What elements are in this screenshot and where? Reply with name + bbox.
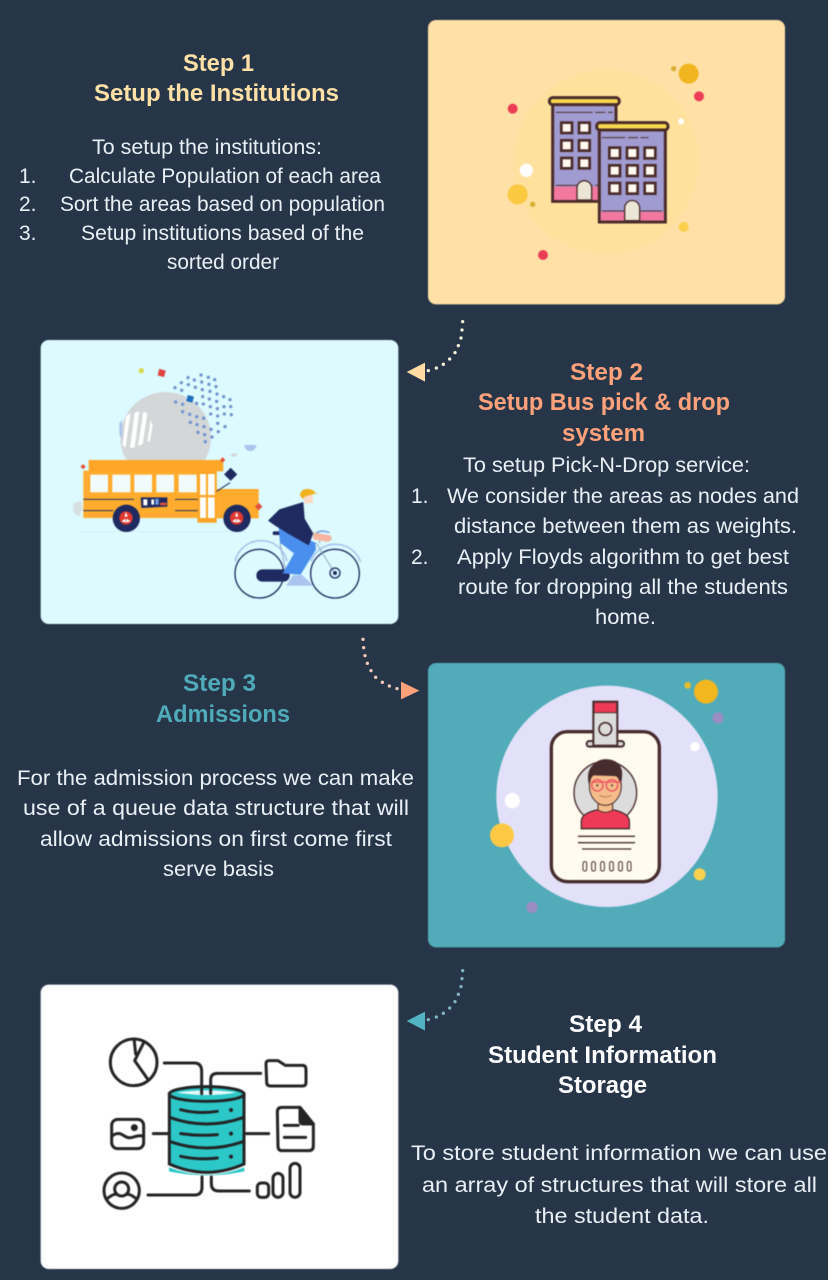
- heading: step 1: Setup the Institutions: [94, 80, 339, 107]
- text block: step 1 body: To setup the institutions:: [92, 136, 322, 159]
- heading: step 2: [478, 359, 730, 447]
- heading: step 4: Storage: [558, 1072, 647, 1099]
- arrow: step 2 to step 3: [361, 638, 419, 699]
- text block: step 3 body: serve basis: [163, 858, 274, 881]
- icon: picture: [112, 1119, 144, 1149]
- panel: step 4 illustration, database: [41, 985, 398, 1269]
- text block: step 2 body: route for dropping all the students: [458, 576, 788, 599]
- text block: step 4 body: the student data.: [535, 1205, 709, 1228]
- text block: step 4 body: To store student information we can use: [411, 1142, 827, 1165]
- text block: step 1 body: 3.: [19, 222, 37, 245]
- text block: step 1 body: sorted order: [167, 251, 279, 274]
- panel: step 4 text: [411, 1011, 827, 1228]
- heading: step 4: [488, 1011, 717, 1099]
- text block: step 1 body: [19, 136, 385, 274]
- heading: step 1: [94, 50, 339, 107]
- heading: step 3: Admissions: [156, 701, 290, 728]
- panel: step 2 illustration, bus and cyclist: [41, 340, 398, 624]
- text block: step 2 body: 2.: [411, 546, 429, 569]
- text block: step 1 body: Sort the areas based on population: [60, 193, 385, 216]
- text block: step 2 body: 1.: [411, 485, 429, 508]
- panel: step 3 text: [17, 670, 414, 881]
- icon: cyclist: [235, 489, 361, 598]
- text block: step 2 body: home.: [595, 606, 656, 629]
- text block: step 3 body: allow admissions on first come first: [40, 828, 392, 851]
- icons and connectors around database: [104, 1039, 313, 1208]
- heading: step 2: Step 2: [570, 359, 643, 386]
- heading: step 1: Step 1: [183, 50, 254, 77]
- text block: step 3 body: For the admission process we can make: [17, 767, 414, 790]
- text block: step 1 body: Setup institutions based of the: [81, 222, 364, 245]
- icon: school bus: [73, 457, 262, 532]
- heading: step 2: system: [562, 420, 645, 447]
- panel: step 1 illustration, buildings: [428, 20, 785, 304]
- decorative dots: badge: [490, 680, 724, 913]
- background globe and dots: [119, 368, 256, 483]
- text block: step 2 body: We consider the areas as nodes and: [447, 485, 799, 508]
- text block: step 1 body: Calculate Population of each area: [69, 165, 381, 188]
- text block: step 3 body: [17, 767, 414, 881]
- icon: pie chart: [110, 1039, 157, 1086]
- icon: database cylinder: [169, 1087, 244, 1175]
- text block: step 1 body: 2.: [19, 193, 37, 216]
- icon: front building: [597, 123, 668, 222]
- heading: step 3: [156, 670, 290, 728]
- arrow: step 3 to step 4: [407, 969, 464, 1031]
- text block: step 1 body: 1.: [19, 165, 37, 188]
- heading: step 2: Setup Bus pick & drop: [478, 389, 730, 416]
- text block: step 4 body: an array of structures that will store all: [422, 1174, 817, 1197]
- heading: step 3: Step 3: [183, 670, 256, 697]
- icon: rear building: [549, 98, 619, 201]
- text block: step 2 body: distance between them as weights.: [454, 515, 797, 538]
- panel: step 2 text: [411, 359, 799, 629]
- icon: id card: [551, 702, 659, 882]
- icon: user: [104, 1173, 139, 1208]
- text block: step 2 body: [411, 454, 799, 629]
- panel: step 3 illustration, id badge: [428, 663, 785, 947]
- arrow: step 1 to step 2: [407, 320, 464, 382]
- text block: step 2 body: Apply Floyds algorithm to get best: [457, 546, 789, 569]
- text block: step 4 body: [411, 1142, 827, 1228]
- panel: step 1 text: [19, 50, 385, 274]
- text block: step 2 body: To setup Pick-N-Drop service:: [463, 454, 750, 477]
- heading: step 4: Student Information: [488, 1042, 717, 1069]
- icon: document: [277, 1107, 313, 1151]
- text block: step 3 body: use of a queue data structure that will: [23, 797, 409, 820]
- icon: folder: [266, 1061, 306, 1086]
- heading: step 4: Step 4: [569, 1011, 643, 1038]
- decorative dots: buildings: [508, 64, 704, 260]
- icon: bar chart: [257, 1163, 300, 1197]
